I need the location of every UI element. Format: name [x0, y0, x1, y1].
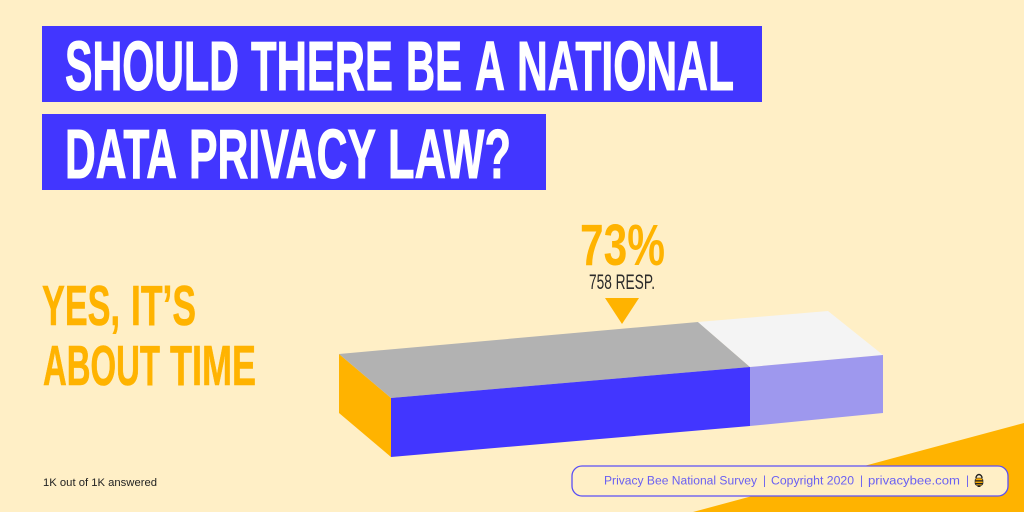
- title line 1: THERE: [251, 27, 393, 105]
- title line 2: PRIVACY: [189, 115, 376, 193]
- respondent count: 758 RESP.: [589, 271, 655, 294]
- title line 1: NATIONAL: [517, 27, 734, 105]
- value: 73%: 73%: [580, 213, 665, 278]
- title line 1: BE: [406, 27, 462, 105]
- percentage callout: [580, 213, 665, 324]
- footer text: Copyright 2020: [771, 476, 854, 488]
- footer pill: [572, 466, 1008, 496]
- corner accent: yellow wedge: [693, 423, 1024, 512]
- title: [42, 26, 762, 193]
- 3D progress bar: [339, 311, 883, 457]
- bar top: remainder: [698, 311, 883, 367]
- answer heading: [42, 274, 256, 398]
- footer text: |: [966, 476, 969, 488]
- title line 1: SHOULD: [65, 27, 239, 105]
- bar top: yes share: [339, 322, 750, 398]
- footer text: |: [860, 476, 863, 488]
- title line 1: A: [475, 27, 505, 105]
- footer text: privacybee.com: [868, 476, 960, 488]
- title line 1: [42, 26, 762, 105]
- bar front: remainder: [750, 355, 883, 426]
- footer text: [604, 476, 969, 488]
- marker arrow: [605, 298, 639, 324]
- footer text: |: [763, 476, 766, 488]
- footer text: Privacy Bee National Survey: [604, 476, 757, 488]
- icon: bee: [975, 475, 983, 487]
- title line 2: DATA: [65, 115, 177, 193]
- title line 2: [42, 114, 546, 193]
- answer heading: ABOUT: [43, 334, 160, 398]
- title line 2: LAW?: [388, 115, 511, 193]
- answer heading: YES,: [42, 274, 120, 338]
- answered count note: 1K out of 1K answered: [43, 477, 157, 489]
- bar front: yes share: [391, 367, 750, 457]
- answer heading: IT’S: [131, 274, 196, 338]
- bar end cap: [339, 354, 391, 457]
- answer heading: TIME: [170, 334, 256, 398]
